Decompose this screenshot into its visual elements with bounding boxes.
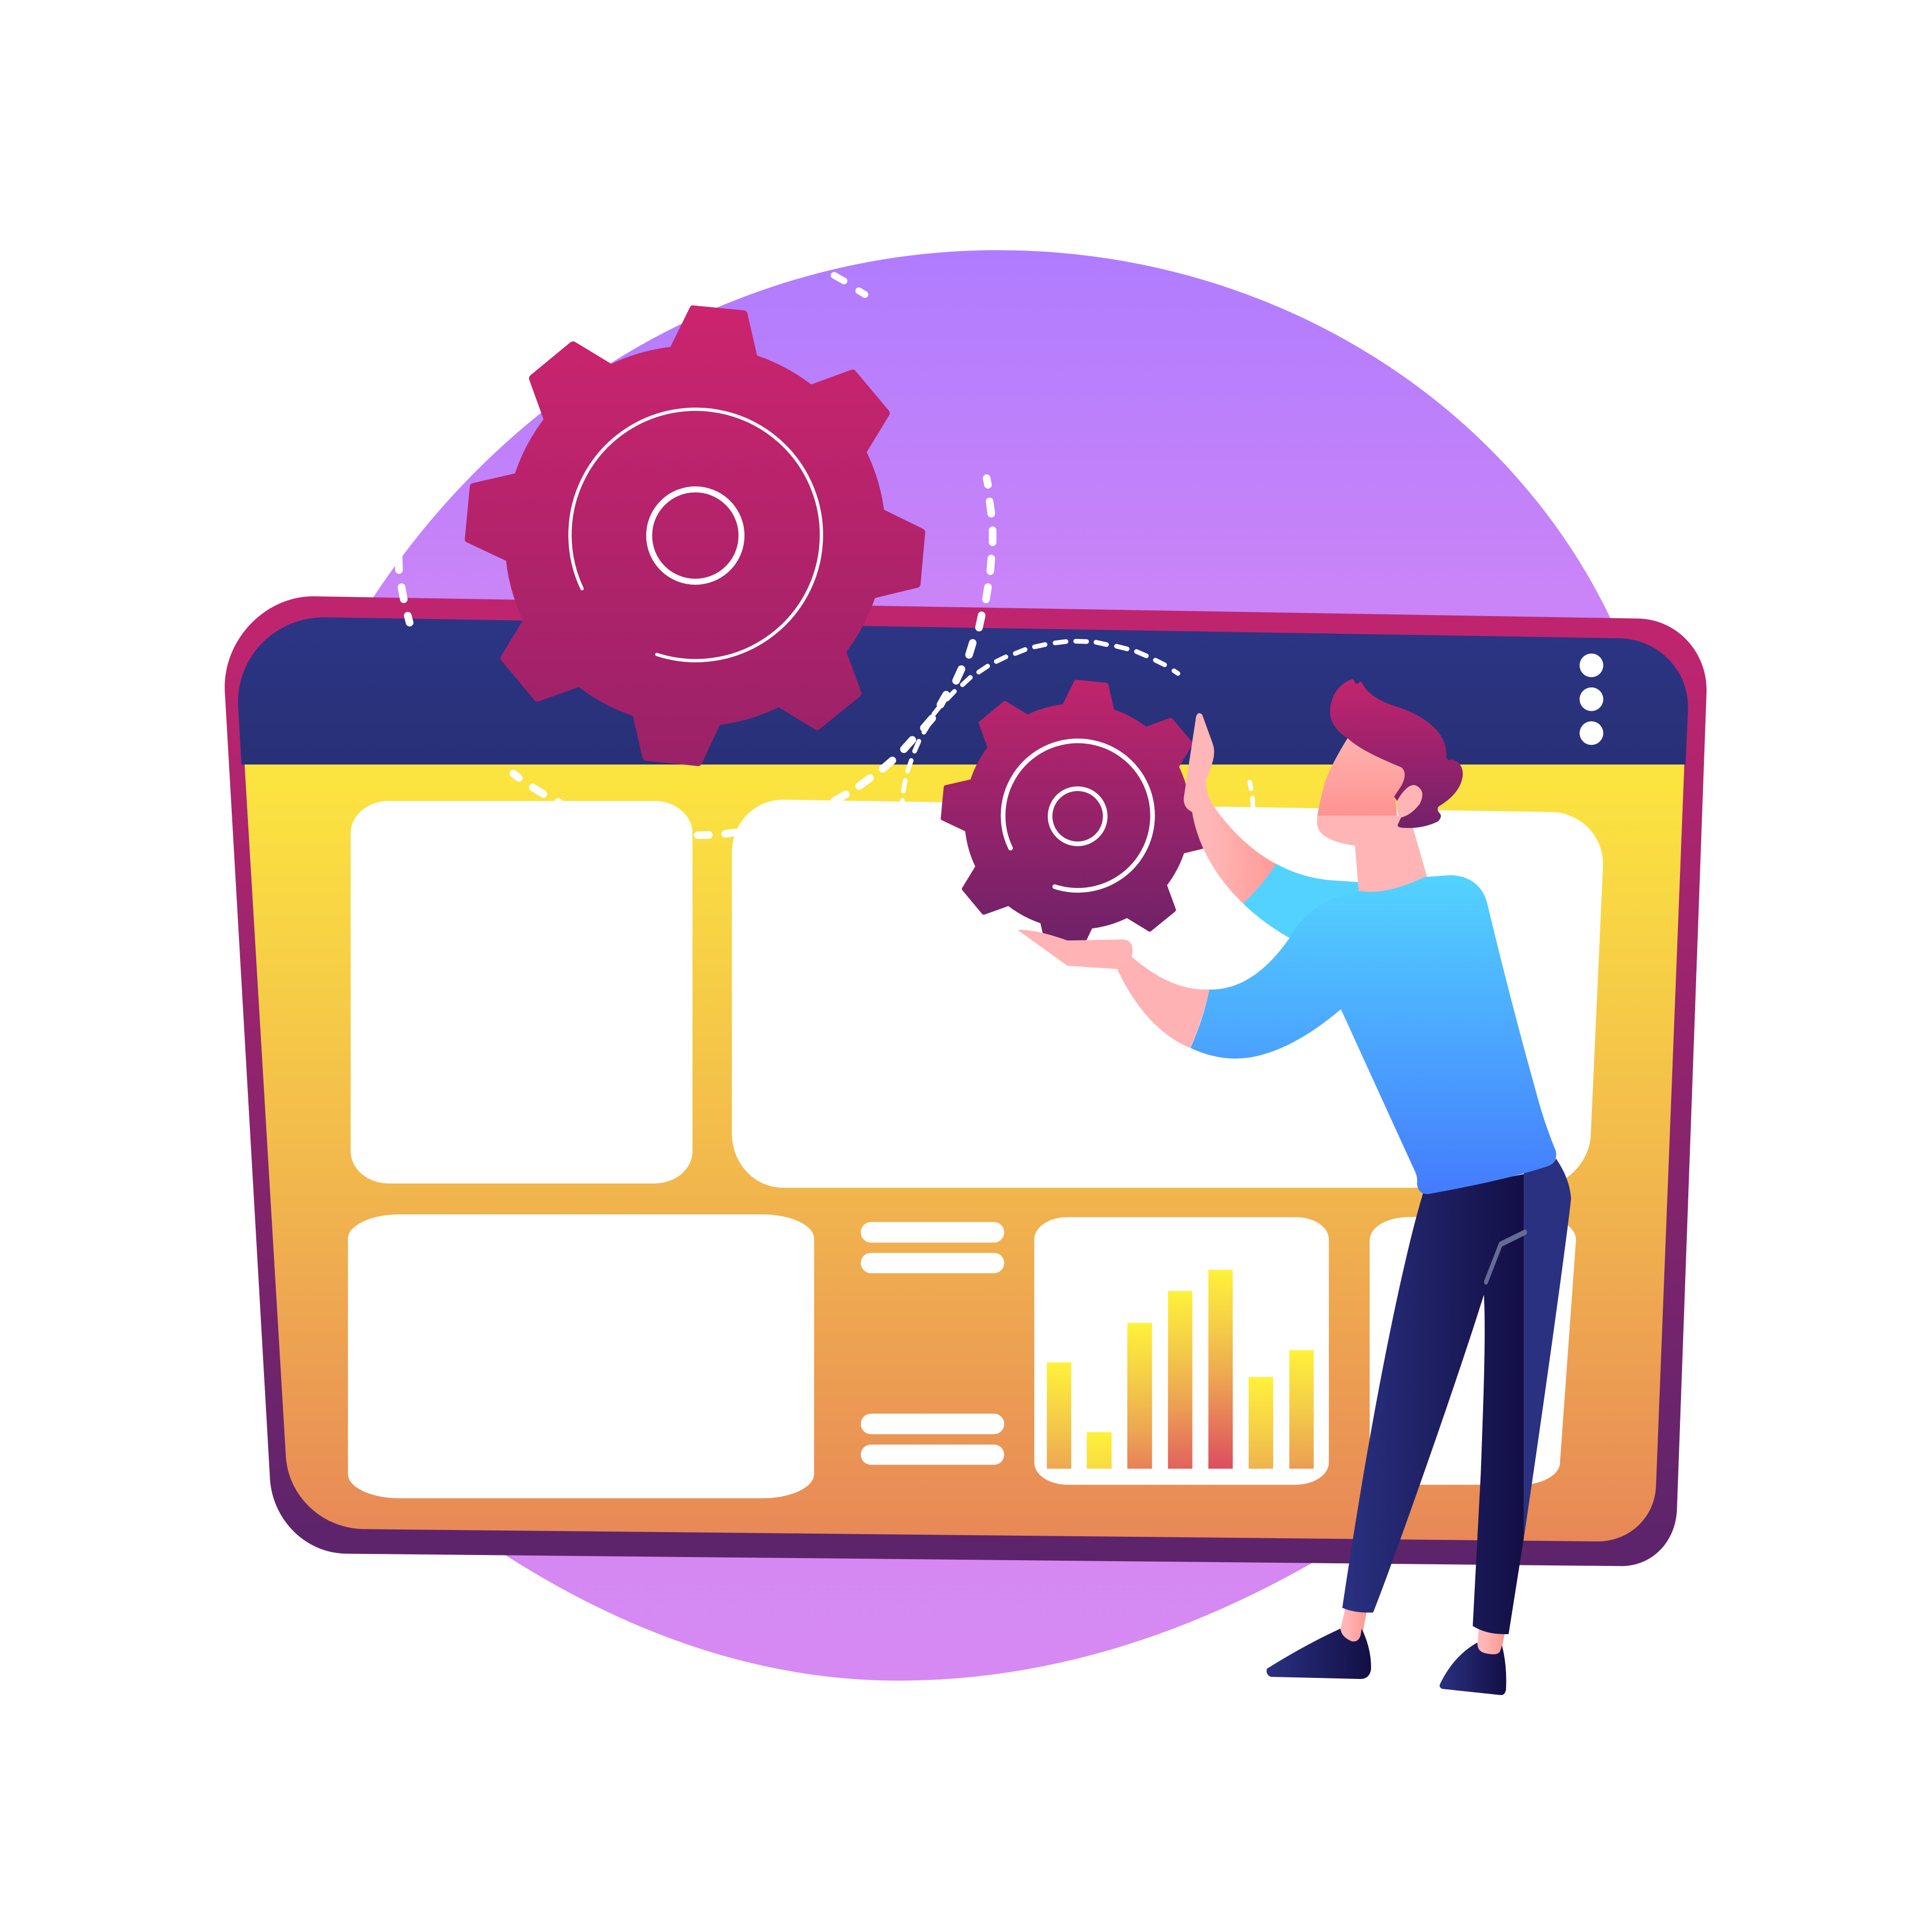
panel: bottom left xyxy=(348,1214,814,1498)
back of trousers xyxy=(1524,1159,1571,1538)
window body xyxy=(245,764,1684,1541)
trail: top dashes xyxy=(834,275,865,294)
text lines xyxy=(861,1222,1004,1465)
right ankle xyxy=(1477,1628,1505,1657)
legs and shoes xyxy=(1266,1159,1571,1695)
hair xyxy=(1330,679,1463,828)
upper face xyxy=(1318,738,1404,816)
dashed motion trails xyxy=(398,275,1253,835)
panel: top left xyxy=(350,801,693,1184)
bar chart xyxy=(1047,1270,1314,1469)
near forearm xyxy=(1118,956,1210,1048)
trousers xyxy=(1343,1174,1524,1634)
raised arm xyxy=(1184,713,1285,908)
icon: large gear xyxy=(465,305,925,766)
panel: top right xyxy=(732,800,1603,1188)
pocket xyxy=(1486,1232,1525,1282)
left shoe xyxy=(1266,1628,1371,1679)
icon: small gear xyxy=(940,680,1214,953)
ear xyxy=(1397,785,1422,818)
panel: bottom right xyxy=(1370,1217,1576,1485)
open hand xyxy=(1018,930,1133,969)
character: man xyxy=(1018,679,1571,1695)
trail: long descending dashes xyxy=(834,478,1253,807)
window title bar xyxy=(238,617,1688,764)
right shoe xyxy=(1439,1642,1506,1695)
background blob xyxy=(345,250,1639,1680)
shirt xyxy=(1190,875,1556,1194)
far sleeve xyxy=(1243,864,1365,938)
menu dots xyxy=(1579,654,1603,745)
panel: bar chart card xyxy=(1034,1217,1329,1485)
upper body and head xyxy=(1184,679,1556,1194)
neck xyxy=(1355,819,1431,906)
window frame xyxy=(225,596,1707,1566)
dashboard window xyxy=(225,596,1707,1566)
left ankle xyxy=(1338,1609,1367,1645)
trail: left dashes xyxy=(398,557,736,835)
lower face xyxy=(1317,816,1401,846)
